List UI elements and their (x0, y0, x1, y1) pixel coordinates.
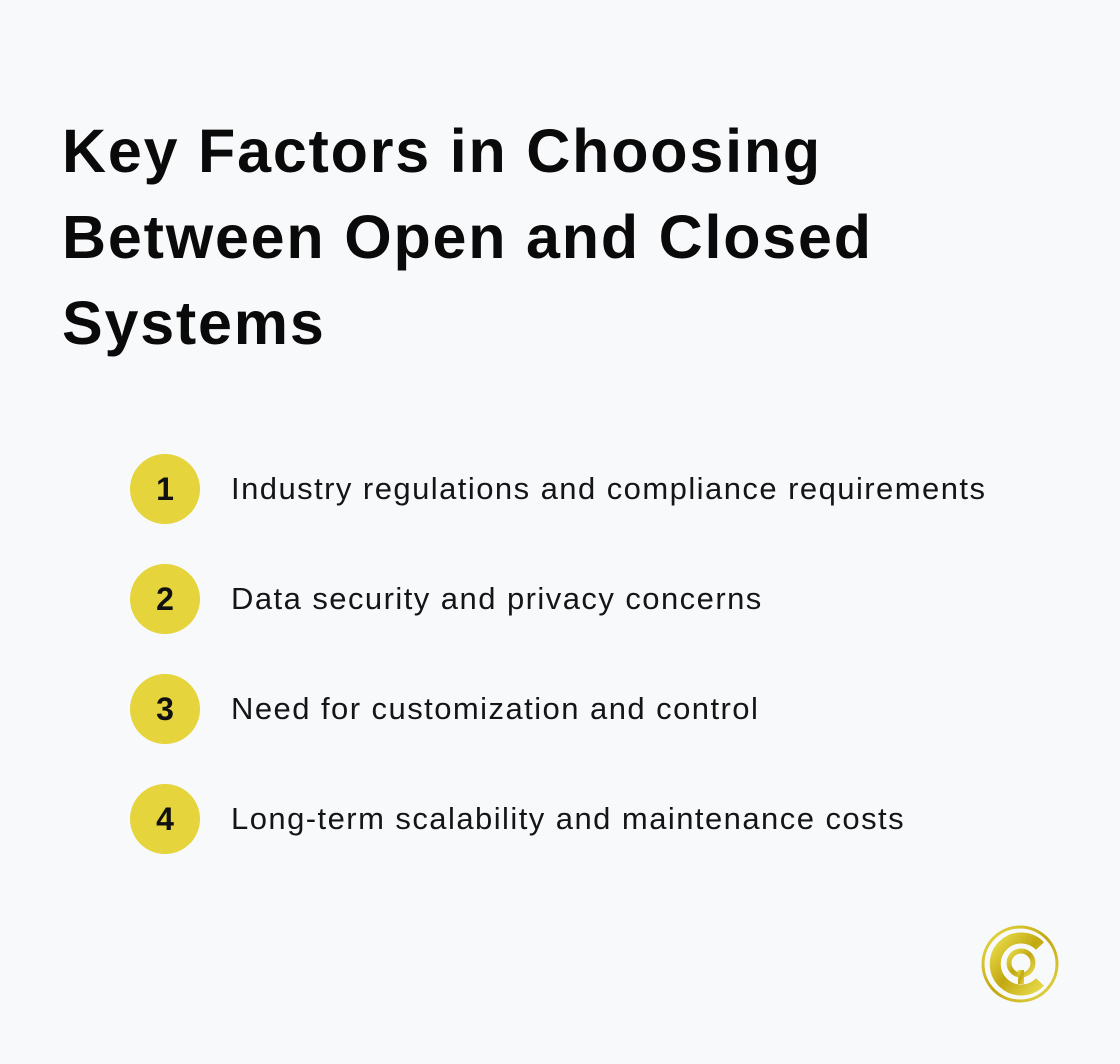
item 4: Long-term scalability and maintenance costs (231, 801, 905, 836)
title (62, 117, 873, 357)
item 3: Need for customization and control (231, 691, 759, 726)
icon: logo (982, 926, 1058, 1002)
item 2: Data security and privacy concerns (231, 581, 763, 616)
item 1 (130, 454, 986, 524)
item 2: 2 (156, 581, 174, 617)
item 1: Industry regulations and compliance requirements (231, 471, 986, 506)
title: Systems (62, 289, 326, 357)
item 2 (130, 564, 763, 634)
item 3 (130, 674, 759, 744)
item 4: 4 (156, 801, 174, 837)
item 1: 1 (156, 471, 174, 507)
title: Key Factors in Choosing (62, 117, 822, 185)
title: Between Open and Closed (62, 203, 873, 271)
item 4 (130, 784, 905, 854)
item 3: 3 (156, 691, 174, 727)
